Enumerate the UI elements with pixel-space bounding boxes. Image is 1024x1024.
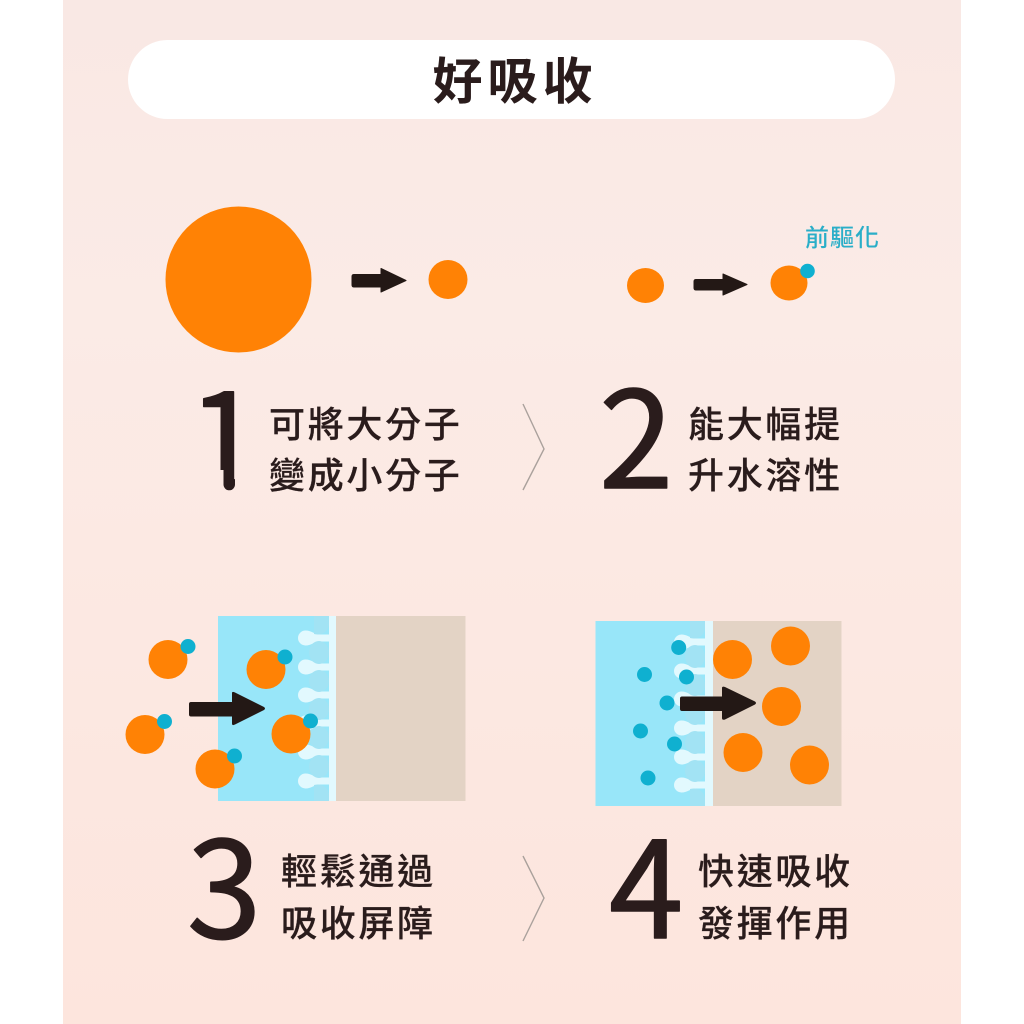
title: 好吸收 (432, 54, 598, 110)
arrow: step 1 (352, 268, 406, 292)
step 1 text: 可將大分子 (269, 404, 463, 445)
step 1 text: 變成小分子 (269, 455, 463, 496)
step 2 text: 升水溶性 (688, 455, 843, 496)
step 4 text (698, 851, 853, 944)
arrow: step 2 (694, 274, 747, 295)
step 2 text: 能大幅提 (688, 404, 843, 445)
arrow: step 4 (680, 687, 756, 720)
label: precursor: 前驅化 (805, 225, 880, 252)
panel: step 1 diagram (166, 206, 468, 352)
step 4 text: 發揮作用 (698, 903, 853, 944)
step 3 text (281, 851, 436, 944)
step 3 text: 吸收屏障 (281, 903, 436, 944)
step 3 text: 輕鬆通過 (281, 851, 436, 892)
arrow: step 3 (189, 692, 265, 725)
step 4 text: 快速吸收 (698, 851, 853, 892)
arrow: chevron bottom (523, 856, 544, 941)
title (128, 40, 895, 119)
step 2 text (688, 404, 843, 496)
step 1 number: 1 (188, 335, 262, 529)
panel: step 2 diagram (627, 225, 880, 303)
arrow: chevron top (523, 404, 544, 490)
panel: step 4 diagram (596, 621, 842, 806)
step 4 number: 4 (609, 783, 683, 977)
step 1 text (269, 404, 463, 496)
step 2 number: 2 (599, 333, 673, 527)
step 3 number: 3 (187, 783, 261, 977)
panel: step 3 diagram (126, 616, 466, 801)
